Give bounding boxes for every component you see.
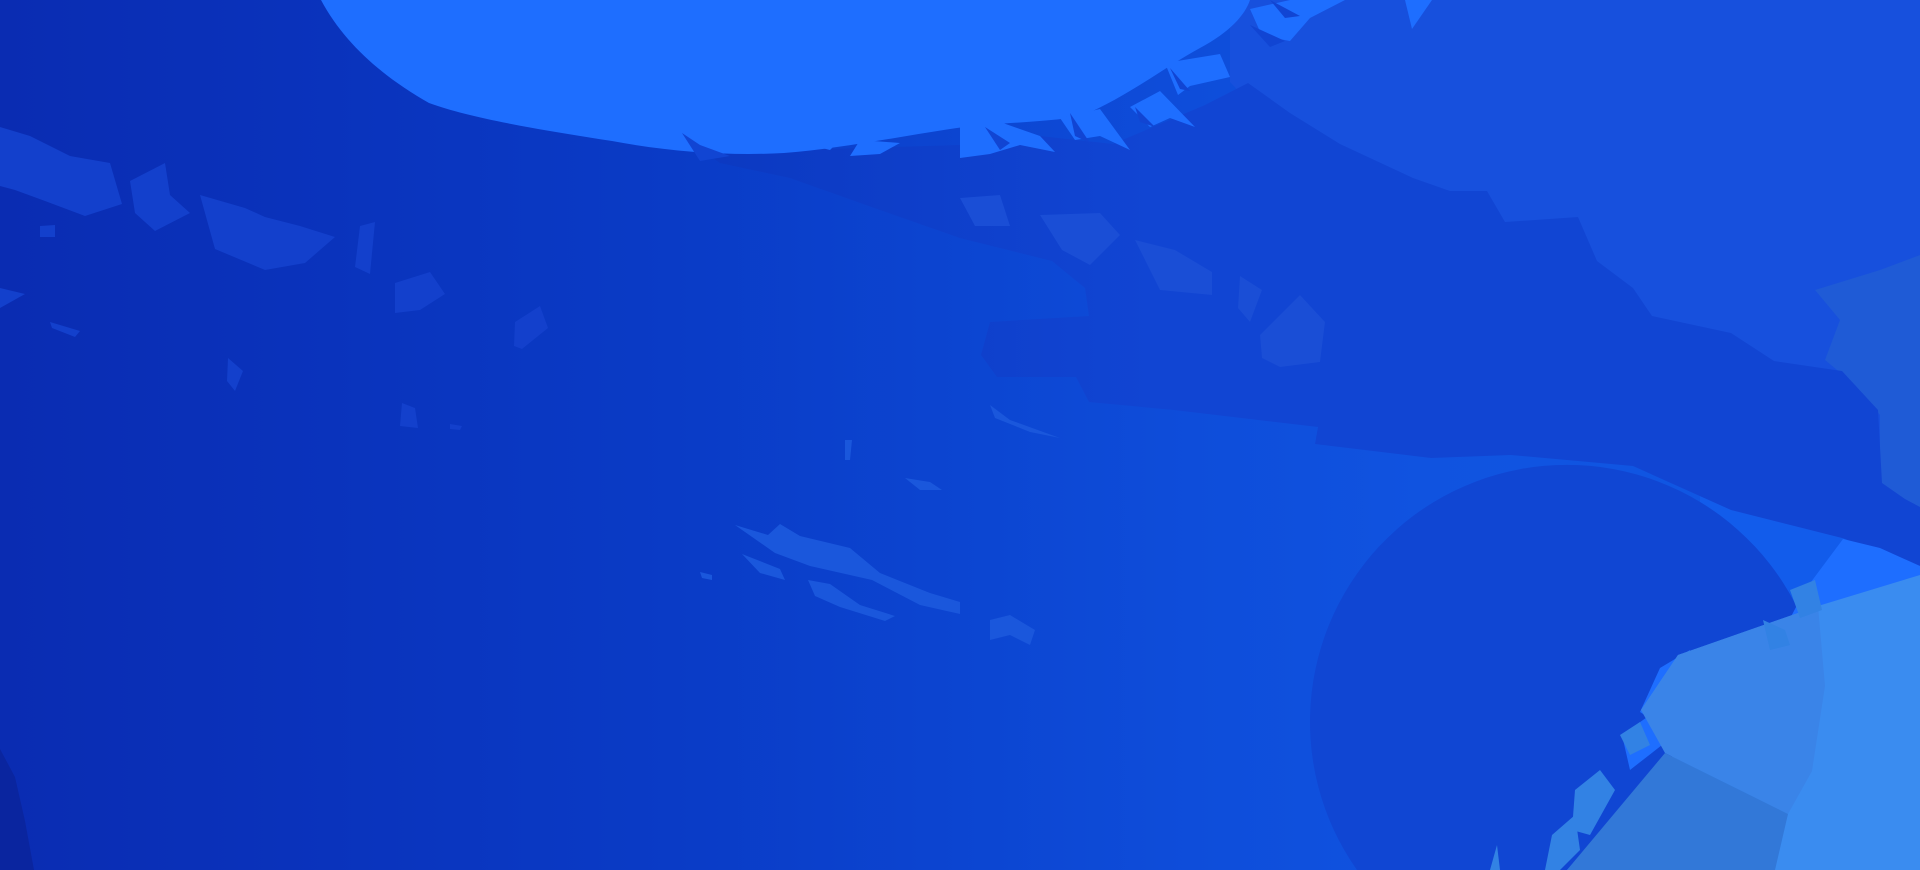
dark diagonal brush band <box>680 83 1920 566</box>
circle shape lower right <box>1310 465 1824 870</box>
dark corner patch bottom left <box>0 749 34 870</box>
left pale speckle band <box>0 127 548 430</box>
darker tone wedge <box>1567 753 1788 870</box>
dark gaps in jagged edge <box>682 0 1300 161</box>
jagged ellipse edge strokes <box>680 0 1432 158</box>
bright edge along lower right wedge <box>1622 539 1920 770</box>
band lighter patches <box>960 195 1325 367</box>
upper right brush region <box>1230 0 1920 510</box>
central pale streak marks <box>700 405 1060 645</box>
top bright ellipse <box>321 0 1250 154</box>
right edge pale haze <box>1815 255 1920 553</box>
lower right light wedge <box>1567 575 1920 870</box>
speckled brush tips near wedge <box>1490 580 1822 870</box>
lower right mid blue wedge <box>1700 450 1920 650</box>
middle tone wedge <box>1641 606 1825 814</box>
